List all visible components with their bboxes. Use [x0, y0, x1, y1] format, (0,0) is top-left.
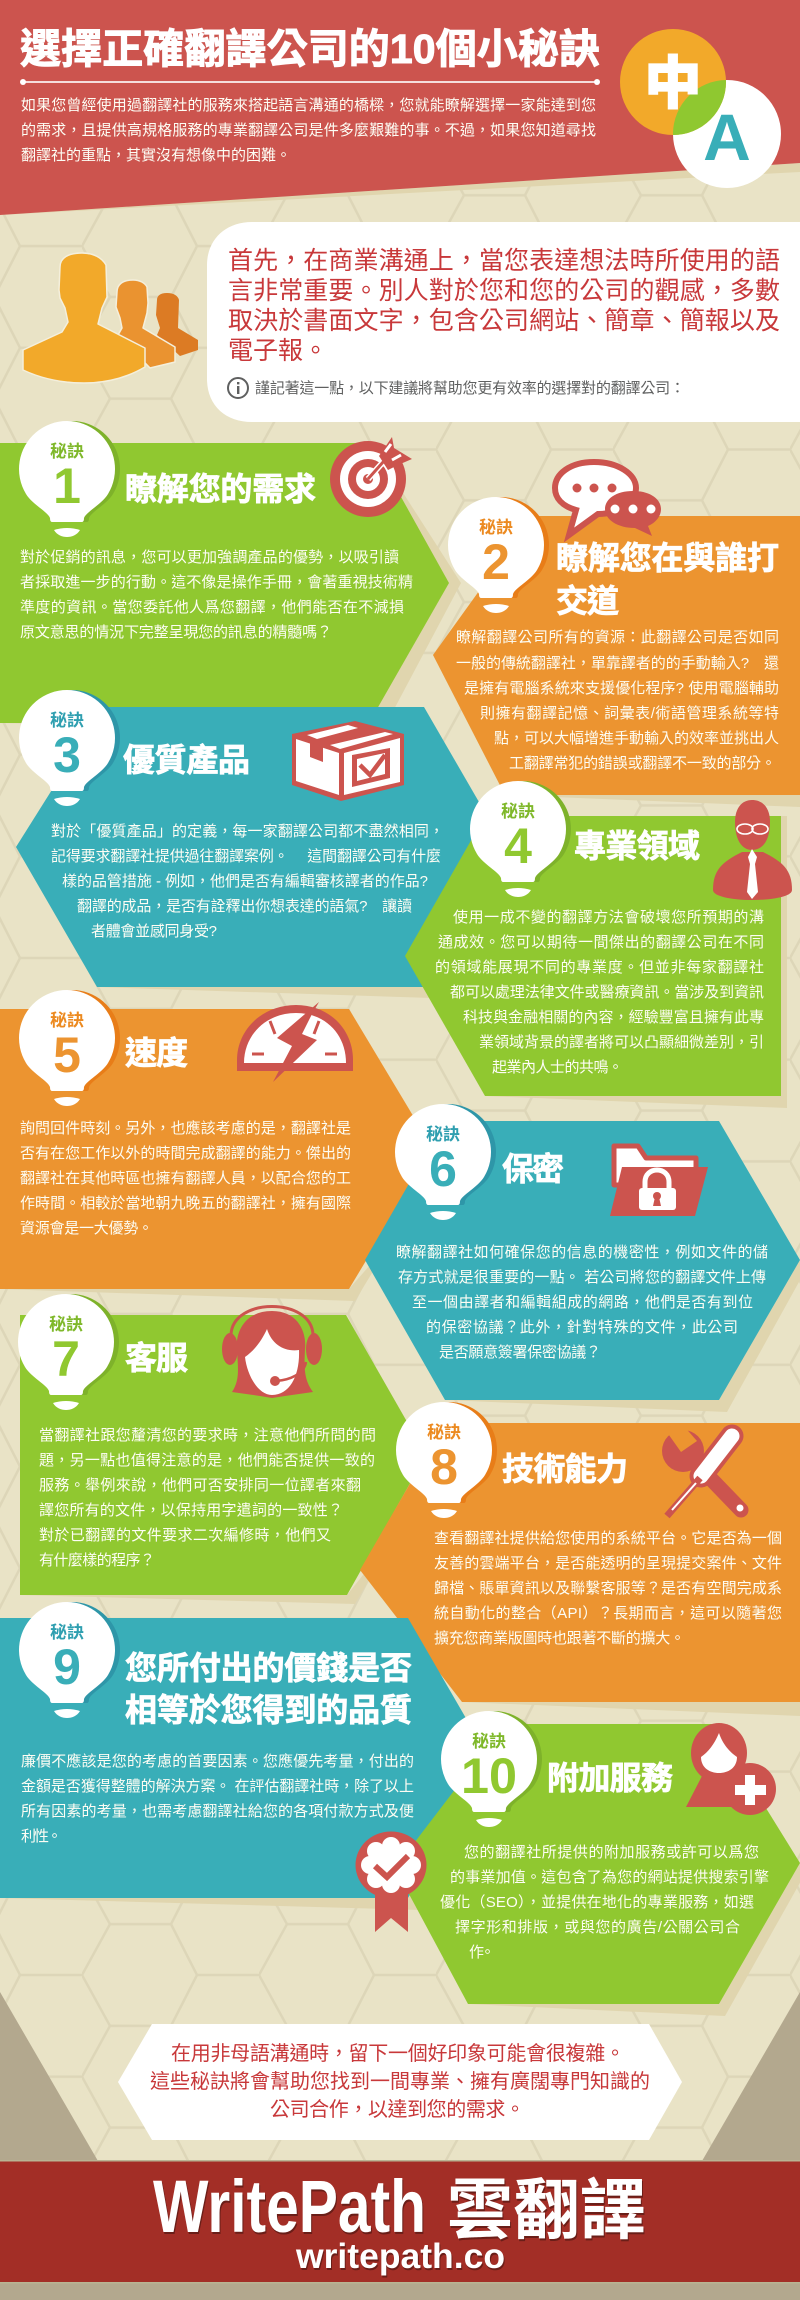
- intro statement: 取決於書面文字，包含公司網站、簡章、簡報以及: [228, 307, 780, 335]
- icon: headset agent: [222, 1306, 322, 1398]
- closing statement: 公司合作，以達到您的需求。: [270, 2098, 525, 2121]
- body 4: 通成效。您可以期待一間傑出的翻譯公司在不同: [438, 934, 764, 951]
- intro text: [21, 97, 596, 164]
- closing statement: [118, 2024, 682, 2140]
- icon: language circles: A: [703, 100, 751, 174]
- body 4: [435, 909, 764, 1076]
- heading 3: 優質產品: [123, 742, 250, 778]
- body 5: 否有在您工作以外的時間完成翻譯的能力。傑出的: [20, 1145, 351, 1162]
- body 1: 對於促銷的訊息，您可以更加強調產品的優勢，以吸引讀: [20, 548, 399, 566]
- intro text: 翻譯社的重點，其實沒有想像中的困難。: [21, 146, 291, 164]
- body 4: 的領域能展現不同的專業度。但並非每家翻譯社: [435, 959, 764, 976]
- body 6: 瞭解翻譯社如何確保您的信息的機密性，例如文件的儲: [396, 1244, 768, 1261]
- body 3: 記得要求翻譯社提供過往翻譯案例。 這間翻譯公司有什麼: [51, 847, 441, 865]
- body 5: 翻譯社在其他時區也擁有翻譯人員，以配合您的工: [20, 1170, 351, 1187]
- body 7: 對於已翻譯的文件要求二次編修時，他們又: [39, 1527, 331, 1544]
- heading 4: 專業領域: [574, 828, 700, 864]
- heading 1: 瞭解您的需求: [125, 471, 316, 507]
- bulb 9: 9: [53, 1639, 81, 1695]
- icon: speedometer: [237, 1002, 353, 1082]
- title divider: [20, 79, 600, 85]
- icon: businessman: [713, 800, 792, 900]
- intro statement: [228, 247, 780, 365]
- heading 6: 保密: [502, 1151, 564, 1187]
- heading 9: [125, 1650, 412, 1728]
- bulb 4: [470, 781, 571, 897]
- panel: tip 3: [16, 690, 505, 998]
- body 6: 是否願意簽署保密協議？: [439, 1343, 601, 1361]
- body 3: 翻譯的成品，是否有詮釋出你想表達的語氣? 讓讀: [77, 897, 412, 915]
- footer chinese brand: 雲翻譯: [447, 2173, 646, 2247]
- body 9: 利性。: [21, 1828, 62, 1845]
- panel: tip 5: [0, 990, 433, 1301]
- intro text: 的需求，且提供高規格服務的專業翻譯公司是件多麼艱難的事。不過，如果您知道尋找: [21, 121, 596, 139]
- icon: wrench and screwdriver: [662, 1424, 744, 1516]
- bulb 1: [19, 421, 120, 537]
- body 3: 樣的品管措施 - 例如，他們是否有編輯審核譯者的作品?: [62, 872, 428, 890]
- bulb 4: 秘訣: [501, 801, 535, 821]
- body 6: 至一個由譯者和編輯組成的網路，他們是否有到位: [412, 1294, 753, 1311]
- body 3: 對於「優質產品」的定義，每一家翻譯公司都不盡然相同，: [51, 822, 444, 840]
- panel: introduction: [207, 222, 800, 422]
- body 8: 統自動化的整合（API）？長期而言，這可以隨著您: [434, 1604, 782, 1622]
- bulb 7: 7: [52, 1331, 80, 1387]
- body 2: 點，可以大幅增進手動輸入的效率並挑出人: [494, 730, 779, 747]
- body 5: [20, 1119, 351, 1237]
- bulb 7: 秘訣: [49, 1314, 83, 1334]
- heading 2: 交道: [556, 583, 619, 619]
- body 10: 作。: [469, 1944, 495, 1961]
- info note: 謹記著這一點，以下建議將幫助您更有效率的選擇對的翻譯公司：: [255, 379, 685, 397]
- icon: people silhouettes: [23, 253, 198, 383]
- icon: info: [228, 378, 248, 398]
- bulb 1: 秘訣: [50, 441, 84, 461]
- bulb 2: 2: [482, 534, 510, 590]
- body 8: [434, 1529, 782, 1647]
- heading 5: 速度: [125, 1035, 188, 1071]
- body 7: 題，另一點也值得注意的是，他們能否提供一致的: [39, 1451, 375, 1469]
- bulb 10: 秘訣: [472, 1731, 506, 1751]
- body 7: 服務。舉例來說，他們可否安排同一位譯者來翻: [39, 1477, 361, 1494]
- heading 9: 相等於您得到的品質: [125, 1692, 412, 1728]
- bulb 4: 4: [504, 818, 532, 874]
- bulb 8: [396, 1402, 497, 1518]
- closing statement: 在用非母語溝通時，留下一個好印象可能會很複雜。: [171, 2042, 625, 2065]
- body 5: 作時間。相較於當地朝九晚五的翻譯社，擁有國際: [20, 1194, 351, 1212]
- bulb 3: [19, 690, 120, 806]
- bulb 8: 8: [430, 1439, 458, 1495]
- body 8: 擴充您商業版圖時也跟著不斷的擴大。: [434, 1629, 685, 1647]
- bulb 1: 1: [53, 458, 81, 514]
- heading 10: 附加服務: [547, 1760, 673, 1796]
- body 8: 查看翻譯社提供給您使用的系統平台。它是否為一個: [434, 1529, 782, 1547]
- body 7: 當翻譯社跟您釐清您的要求時，注意他們所問的問: [39, 1426, 376, 1444]
- footer brand: WritePath: [153, 2165, 426, 2248]
- bulb 2: [448, 497, 549, 613]
- icon: chat bubbles: [555, 462, 661, 536]
- bulb 3: 秘訣: [50, 710, 84, 730]
- panel: tip 1: [0, 421, 461, 732]
- bulb 7: [18, 1294, 119, 1410]
- body 10: 的事業加值。這包含了為您的網站提供搜索引擎: [450, 1868, 769, 1886]
- footer side wedges: [0, 1992, 800, 2300]
- title: 選擇正確翻譯公司的10個小秘訣: [20, 26, 600, 72]
- body 4: 科技與金融相關的內容，經驗豐富且擁有此專: [463, 1008, 764, 1026]
- body 9: 廉價不應該是您的考慮的首要因素。您應優先考量，付出的: [21, 1752, 414, 1770]
- body 6: 的保密協議？此外，針對特殊的文件，此公司: [426, 1318, 738, 1336]
- heading 2: [556, 540, 779, 619]
- heading 9: 您所付出的價錢是否: [125, 1650, 412, 1686]
- body 2: 工翻譯常犯的錯誤或翻譯不一致的部分。: [509, 755, 776, 772]
- panel: tip 4: [405, 781, 792, 1108]
- bulb 8: 秘訣: [427, 1422, 461, 1442]
- bulb 9: 秘訣: [50, 1622, 84, 1642]
- body 6: 存方式就是很重要的一點。 若公司將您的翻譯文件上傳: [398, 1269, 766, 1286]
- body 4: 使用一成不變的翻譯方法會破壞您所預期的溝: [453, 909, 764, 926]
- body 2: 一般的傳統翻譯社，單靠譯者的的手動輸入? 還: [456, 654, 779, 672]
- panel: tip 7: [18, 1294, 426, 1604]
- bulb 5: [19, 990, 120, 1106]
- body 10: 您的翻譯社所提供的附加服務或許可以爲您: [464, 1844, 759, 1861]
- bulb 6: 秘訣: [426, 1124, 460, 1144]
- body 9: 金額是否獲得整體的解決方案。 在評估翻譯社時，除了以上: [21, 1778, 414, 1795]
- panel: tip 6: [365, 1104, 800, 1412]
- body 3: 者體會並感同身受?: [91, 922, 217, 940]
- body 1: 準度的資訊。當您委託他人爲您翻譯，他們能否在不減損: [20, 599, 404, 616]
- intro statement: 電子報。: [228, 337, 328, 365]
- body 2: 是擁有電腦系統來支援優化程序? 使用電腦輔助: [464, 679, 779, 697]
- bulb 2: 秘訣: [479, 517, 513, 537]
- bulb 5: 5: [53, 1027, 81, 1083]
- icon: box with check: [292, 721, 404, 801]
- body 1: [20, 548, 413, 641]
- icon: person with plus: [686, 1723, 776, 1815]
- bulb 6: [395, 1104, 496, 1220]
- body 10: 擇字形和排版，或與您的廣告/公關公司合: [455, 1918, 740, 1936]
- body 5: 資源會是一大優勢。: [20, 1219, 153, 1237]
- bulb 10: 10: [461, 1748, 517, 1804]
- icon: quality rosette: [356, 1832, 426, 1932]
- bulb 6: 6: [429, 1141, 457, 1197]
- body 7: [39, 1426, 376, 1569]
- panel: tip 9: [0, 1602, 489, 1910]
- bulb 3: 3: [53, 727, 81, 783]
- body 4: 業領域背景的譯者將可以凸顯細微差別，引: [479, 1034, 764, 1051]
- icon: language circles: [620, 29, 781, 188]
- body 1: 者採取進一步的行動。這不像是操作手冊，會著重視技術精: [20, 573, 413, 591]
- footer banner: [0, 2160, 800, 2284]
- intro statement: 言非常重要。別人對於您和您的公司的觀感，多數: [228, 277, 780, 305]
- bulb 9: [19, 1602, 120, 1718]
- icon: locked folder: [610, 1146, 708, 1216]
- body 2: 瞭解翻譯公司所有的資源：此翻譯公司是否如同: [456, 629, 779, 646]
- body 5: 詢問回件時刻。另外，也應該考慮的是，翻譯社是: [20, 1119, 351, 1137]
- closing statement: 這些秘訣將會幫助您找到一間專業、擁有廣闊專門知識的: [150, 2070, 650, 2093]
- body 7: 有什麼樣的程序？: [39, 1551, 155, 1569]
- intro text: 如果您曾經使用過翻譯社的服務來搭起語言溝通的橋樑，您就能瞭解選擇一家能達到您: [21, 97, 596, 114]
- body 9: 所有因素的考量，也需考慮翻譯社給您的各項付款方式及便: [21, 1803, 414, 1820]
- body 8: 歸檔、賬單資訊以及聯繫客服等？是否有空間完成系: [434, 1579, 782, 1597]
- body 10: 優化（SEO），並提供在地化的專業服務，如選: [440, 1893, 754, 1911]
- body 6: [396, 1244, 768, 1361]
- body 2: [456, 629, 779, 772]
- heading 2: 瞭解您在與誰打: [556, 540, 779, 576]
- bulb 10: [441, 1711, 542, 1827]
- heading 7: 客服: [125, 1340, 188, 1376]
- header banner: [0, 0, 800, 215]
- body 8: 友善的雲端平台，是否能透明的呈現提交案件、文件: [434, 1554, 782, 1572]
- body 4: 起業內人士的共鳴。: [492, 1059, 623, 1076]
- body 10: [440, 1844, 769, 1961]
- body 3: [51, 822, 444, 940]
- body 2: 則擁有翻譯記憶、詞彙表/術語管理系統等特: [480, 704, 779, 722]
- icon: target: [330, 437, 412, 517]
- heading 8: 技術能力: [502, 1451, 628, 1487]
- panel: tip 2: [433, 462, 800, 807]
- body 1: 原文意思的情況下完整呈現您的訊息的精髓嗎？: [20, 623, 332, 641]
- panel: tip 10: [395, 1711, 800, 2016]
- body 4: 都可以處理法律文件或醫療資訊。當涉及到資訊: [450, 984, 764, 1001]
- intro statement: 首先，在商業溝通上，當您表達想法時所使用的語: [228, 247, 780, 275]
- panel: tip 8: [360, 1402, 800, 1716]
- footer url: writepath.co: [295, 2237, 505, 2276]
- icon: language circles: 中: [645, 52, 701, 115]
- body 7: 譯您所有的文件，以保持用字遣詞的一致性？: [39, 1502, 343, 1519]
- body 9: [21, 1752, 414, 1845]
- bulb 5: 秘訣: [50, 1010, 84, 1030]
